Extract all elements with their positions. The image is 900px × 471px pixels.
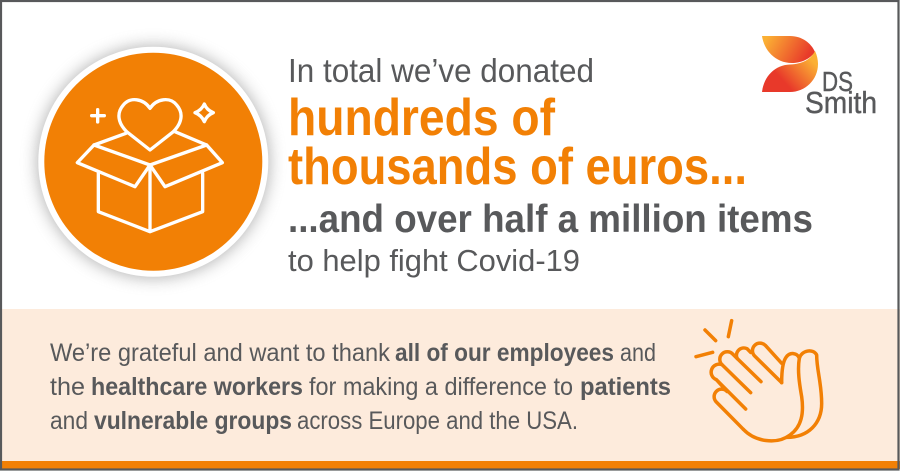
icon: gift box with heart in orange circle xyxy=(37,46,269,278)
text block: thanks message: patients xyxy=(580,373,671,401)
text block: thanks message: for making a difference to xyxy=(309,373,573,401)
bottom orange bar xyxy=(0,461,900,469)
text block: thanks message: the xyxy=(50,373,85,401)
heading: thousands of euros: thousands of euros... xyxy=(288,138,747,196)
text block: thanks message: healthcare workers xyxy=(91,373,303,401)
logo: DS Smith: DS xyxy=(822,66,853,97)
logo: DS Smith: Smith xyxy=(805,85,877,120)
text block: thanks message: across Europe and the USA. xyxy=(297,407,578,435)
text block: thanks message: vulnerable groups xyxy=(94,407,292,435)
text block: thanks message: all of our employees xyxy=(395,339,614,367)
heading: half a million items: ...and over half a million items xyxy=(288,198,813,241)
text block: thanks message xyxy=(50,339,671,435)
heading: to help fight Covid-19: to help fight Covid-19 xyxy=(288,243,580,278)
heading: in total we've donated: In total we’ve donated xyxy=(288,52,594,89)
panel: thank-you band xyxy=(0,309,900,461)
icon: clapping hands xyxy=(696,321,822,441)
text block: thanks message: and xyxy=(620,339,656,367)
heading: hundreds of: hundreds of xyxy=(288,89,556,147)
text block: thanks message: We’re grateful and want to thank xyxy=(50,339,390,367)
text block: thanks message: and xyxy=(50,407,88,435)
logo: DS Smith xyxy=(762,36,877,120)
